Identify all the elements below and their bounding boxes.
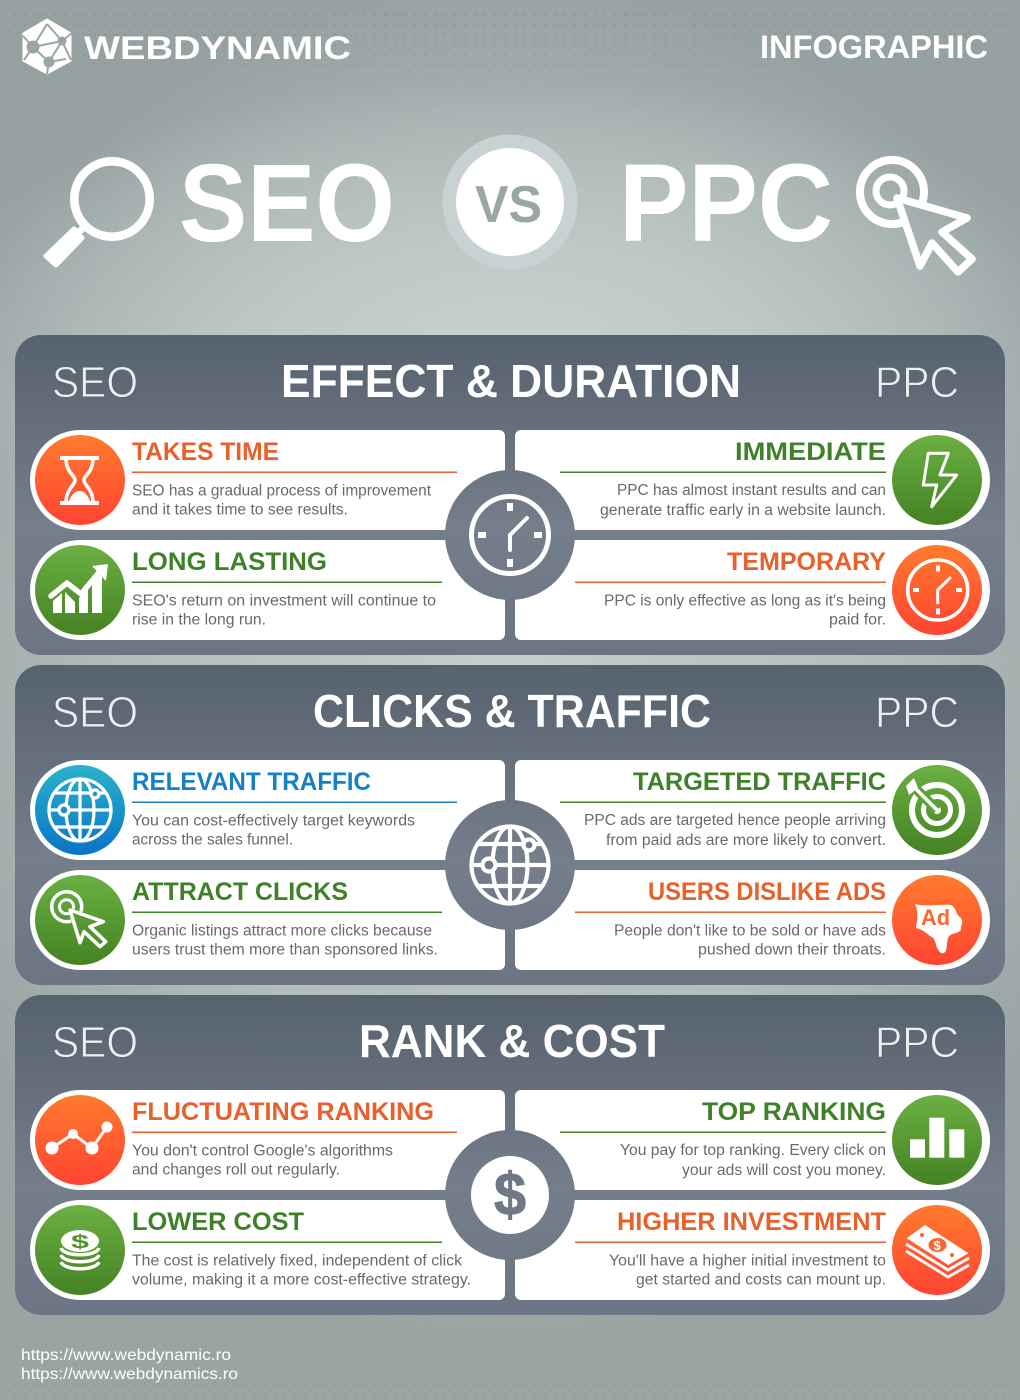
card: targeted traffic [515,760,990,860]
card: fluctuating ranking [30,1090,505,1190]
logo [23,19,351,74]
vs badge: VS [475,176,542,234]
panel heading: RANK & COST [359,1015,665,1067]
card: relevant traffic: RELEVANT TRAFFIC [132,768,371,796]
card: lower cost: The cost is relatively fixed, independent of click [132,1252,462,1270]
card: long lasting: SEO's return on investment will continue to [132,592,436,610]
center badge: dollar [445,1130,575,1260]
panel label: PPC: PPC [875,1018,959,1067]
card: long lasting: rise in the long run. [132,612,266,628]
panel label: SEO: SEO [52,688,138,737]
panel label: SEO: SEO [52,1018,138,1067]
card: immediate: generate traffic early in a website launch. [600,502,886,519]
card: top ranking [515,1090,990,1190]
card: top ranking: your ads will cost you money. [682,1162,886,1179]
panel heading: EFFECT & DURATION [281,355,741,407]
icon: hourglass [60,458,99,503]
panel heading: CLICKS & TRAFFIC [313,685,711,737]
card: lower cost: volume, making it a more cost-effective strategy. [132,1272,471,1288]
card: temporary [515,540,990,640]
icon: cursor [52,892,106,947]
card: higher investment: You'll have a higher initial investment to [609,1252,886,1270]
vs badge [442,134,578,270]
panel: rank and cost [15,995,1005,1315]
center badge: dollar: $ [494,1161,526,1228]
card: attract clicks: Organic listings attract more clicks because [132,922,432,940]
icon: line chart [46,1122,112,1154]
card: immediate [515,430,990,530]
center badge: clock [445,470,575,600]
card: higher investment: get started and costs can mount up. [636,1272,886,1288]
panel: effect and duration [15,335,1005,655]
card: relevant traffic: across the sales funnel. [132,832,293,848]
icon: target [906,778,962,835]
icon: thumbs down ad [915,904,962,953]
card: users dislike ads: People don't like to be sold or have ads [614,922,886,940]
card: lower cost [30,1200,505,1300]
card: attract clicks: users trust them more than sponsored links. [132,942,438,958]
card: top ranking: You pay for top ranking. Every click on [620,1142,886,1159]
card: relevant traffic [30,760,505,860]
panel label: PPC: PPC [875,688,959,737]
card: long lasting: LONG LASTING [132,548,327,576]
card: long lasting [30,540,505,640]
footer links [21,1347,238,1383]
icon: clock [908,560,968,620]
card: users dislike ads [515,870,990,970]
card: targeted traffic: TARGETED TRAFFIC [633,768,886,796]
card: fluctuating ranking: You don't control Google's algorithms [132,1142,393,1160]
icon: lightning [923,453,957,507]
center badge: globe [445,800,575,930]
footer links: https://www.webdynamics.ro [21,1366,238,1383]
panel: clicks and traffic [15,665,1005,985]
card: takes time: TAKES TIME [132,438,279,466]
card: immediate: IMMEDIATE [735,438,886,466]
icon: network hexagon [23,19,72,74]
card: top ranking: TOP RANKING [702,1098,886,1126]
card: higher investment: HIGHER INVESTMENT [617,1208,886,1236]
label: infographic: INFOGRAPHIC [760,29,988,65]
heading: PPC: PPC [619,142,833,265]
card: fluctuating ranking: FLUCTUATING RANKING [132,1098,434,1126]
icon: coins: $ [71,1232,90,1253]
icon: money stack: $ [934,1238,942,1253]
icon: thumbs down ad: Ad [921,905,950,930]
card: lower cost: LOWER COST [132,1208,304,1236]
icon: growth chart [51,564,108,613]
icon: bars [910,1118,964,1158]
card: immediate: PPC has almost instant results and can [617,482,886,499]
icon: magnifying glass [46,161,150,265]
heading: SEO: SEO [179,142,395,265]
icon: money stack [906,1225,969,1277]
icon: cursor click [860,160,972,272]
card: attract clicks [30,870,505,970]
icon: coins [61,1230,99,1269]
card: takes time [30,430,505,530]
footer links: https://www.webdynamic.ro [21,1347,231,1364]
card: relevant traffic: You can cost-effectively target keywords [132,812,415,830]
card: attract clicks: ATTRACT CLICKS [132,878,348,906]
card: temporary: PPC is only effective as long as it's being [604,592,886,610]
card: users dislike ads: USERS DISLIKE ADS [648,878,886,906]
card: users dislike ads: pushed down their throats. [698,942,886,958]
icon: globe [49,779,111,841]
panel label: SEO: SEO [52,358,138,407]
card: targeted traffic: PPC ads are targeted hence people arriving [584,812,886,829]
card: takes time: and it takes time to see results. [132,502,348,518]
card: higher investment [515,1200,990,1300]
card: takes time: SEO has a gradual process of improvement [132,482,432,500]
logo wordmark: WEBDYNAMIC [84,30,351,66]
card: temporary: TEMPORARY [727,548,886,576]
card: targeted traffic: from paid ads are more likely to convert. [606,832,886,849]
card: fluctuating ranking: and changes roll out regularly. [132,1162,340,1178]
card: temporary: paid for. [829,612,886,628]
panel label: PPC: PPC [875,358,959,407]
